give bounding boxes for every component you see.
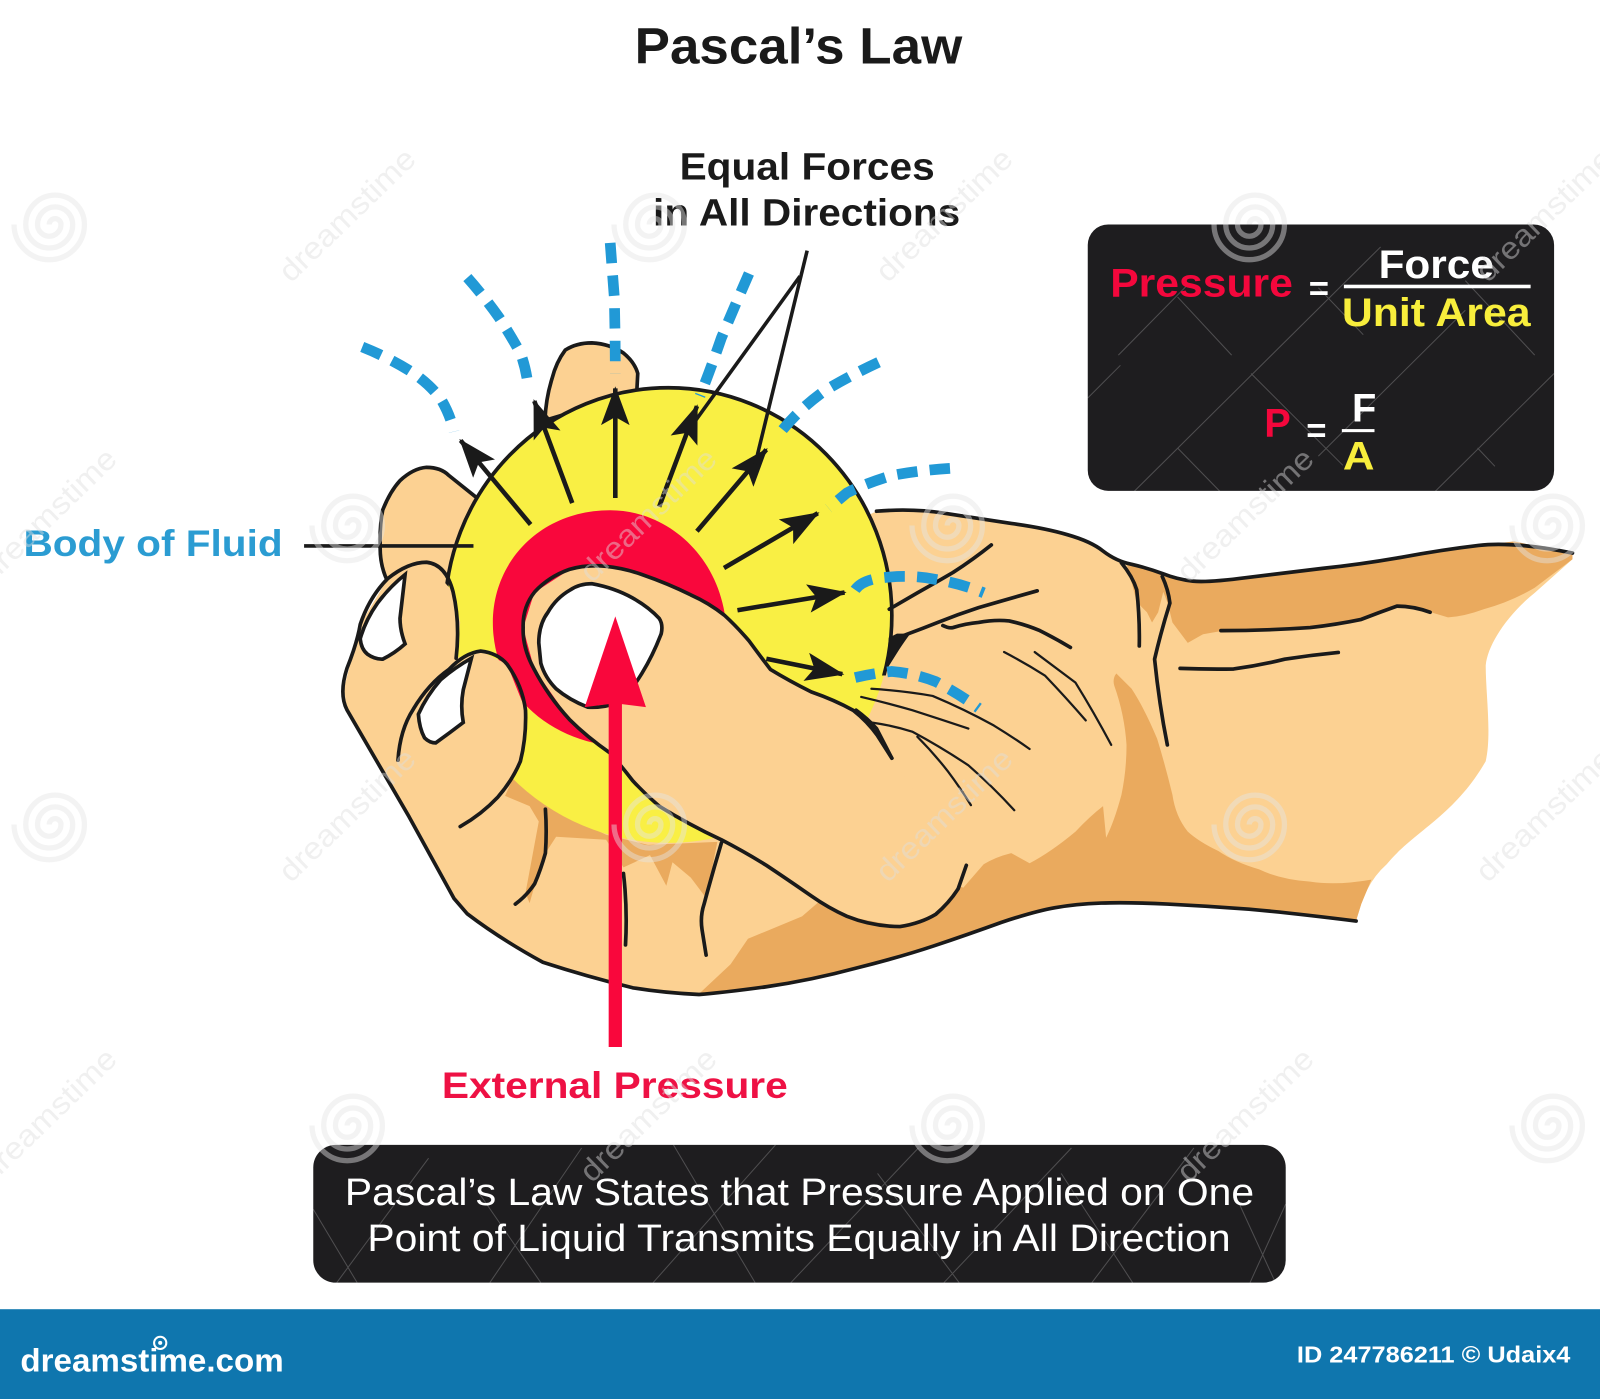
hand illustration <box>343 343 1572 995</box>
formula in symbols: F <box>1352 386 1376 430</box>
footer bar <box>0 1309 1600 1399</box>
label: equal forces <box>653 146 960 234</box>
blue dashed pressure waves <box>362 243 984 708</box>
pointer lines to equal forces <box>695 251 807 464</box>
hand outline <box>877 510 1572 581</box>
panel: pressure formula <box>1088 224 1554 492</box>
yellow ball: body of fluid <box>445 388 892 843</box>
footer image id: ID 247786211 © Udaix4 <box>1297 1341 1570 1367</box>
label: external pressure: External Pressure <box>442 1065 788 1106</box>
formula in words: = <box>1309 270 1329 308</box>
watermark spirals <box>14 195 1582 1161</box>
watermark text <box>0 142 1600 1189</box>
watermark text: dreamstime <box>272 742 423 889</box>
watermark text: dreamstime <box>869 742 1020 889</box>
watermark text: dreamstime <box>1170 442 1321 589</box>
formula in words: Unit Area <box>1342 291 1532 335</box>
wedge at thumb web <box>887 634 910 669</box>
formula in symbols: A <box>1343 434 1374 478</box>
back finger left <box>380 467 480 587</box>
middle finger outline <box>398 651 526 827</box>
wrist shadow <box>1127 541 1572 643</box>
formula in symbols: = <box>1306 412 1326 450</box>
thumb underside line <box>610 753 966 927</box>
formula in words <box>1110 243 1532 335</box>
watermark text: dreamstime <box>869 142 1020 289</box>
external pressure arrow <box>585 616 646 1047</box>
front fingers <box>344 562 526 913</box>
finger nail one <box>360 574 405 659</box>
back finger top <box>545 343 638 420</box>
watermark text: dreamstime <box>272 142 423 289</box>
title: Pascal’s Law <box>635 17 963 74</box>
red pressure crescent <box>493 510 726 743</box>
label: body of fluid: Body of Fluid <box>23 523 283 564</box>
hand and arm silhouette <box>347 510 1572 995</box>
thumb nail <box>539 584 662 707</box>
watermark text: dreamstime <box>573 1042 724 1189</box>
hand lower outline <box>343 562 1356 995</box>
palm shadow <box>505 770 717 903</box>
panel: law statement: Point of Liquid Transmits Equally in All Direction <box>367 1217 1231 1259</box>
panel: law statement <box>313 1145 1286 1283</box>
panel: law statement: Pascal’s Law States that Pressure Applied on One <box>345 1171 1254 1213</box>
thumb <box>523 566 966 927</box>
formula in symbols: P <box>1264 402 1291 446</box>
label: equal forces: in All Directions <box>653 192 960 234</box>
watermark text: dreamstime <box>1170 1042 1321 1189</box>
thumb outlines <box>523 566 892 758</box>
formula in symbols <box>1264 386 1376 478</box>
watermark text: dreamstime <box>573 442 724 589</box>
formula in words: Force <box>1379 243 1494 287</box>
label: equal forces: Equal Forces <box>680 146 935 188</box>
black force arrows <box>461 388 845 674</box>
footer logo: dreamstime.com <box>20 1341 284 1378</box>
finger nail two <box>418 658 471 743</box>
arm shadow <box>699 673 1371 994</box>
palm creases <box>515 545 1430 955</box>
ball outline <box>445 386 894 676</box>
wrinkle lines <box>861 652 1111 810</box>
formula in words: Pressure <box>1110 261 1293 305</box>
